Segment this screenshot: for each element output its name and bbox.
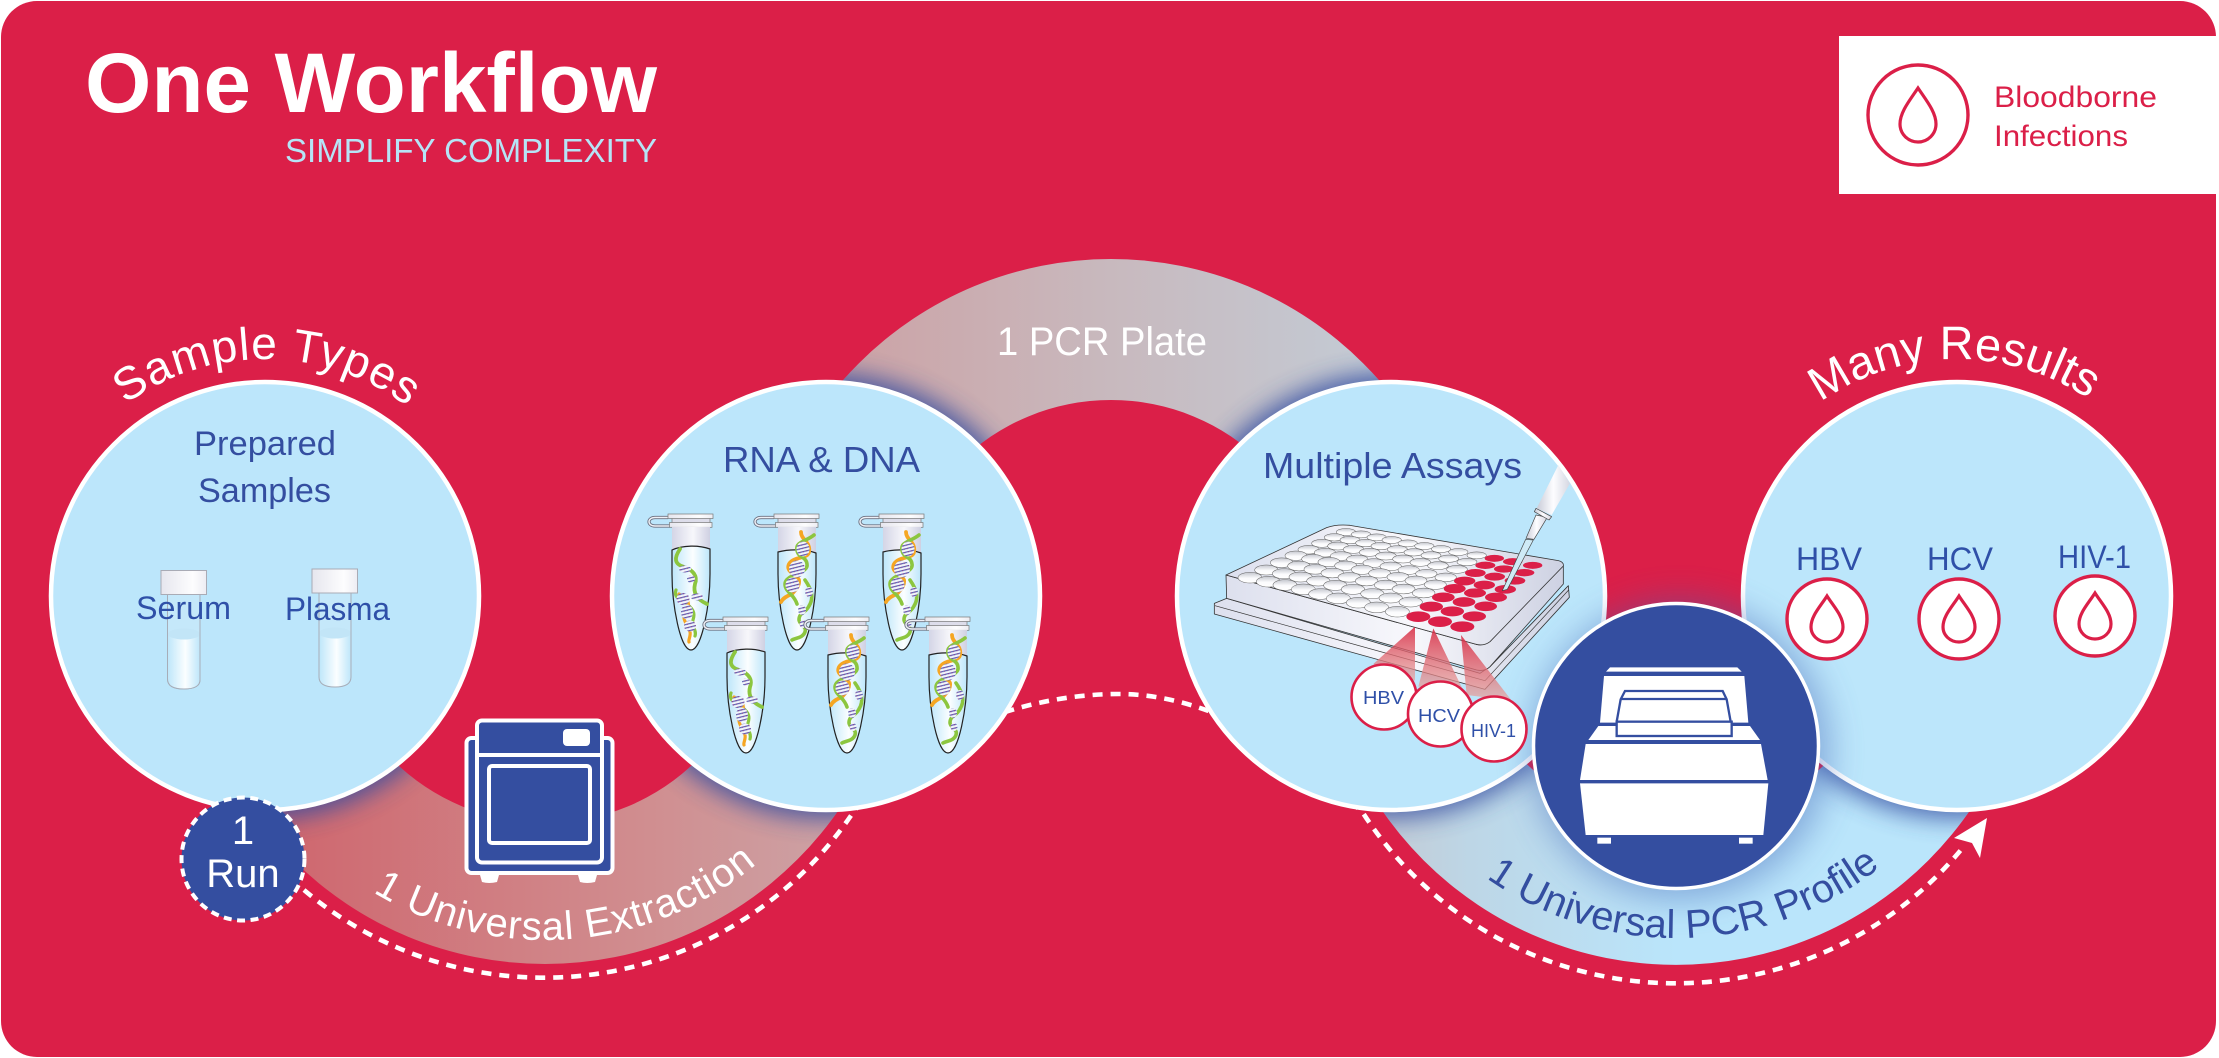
arc band: 1 universal PCR profile: [1383, 764, 1969, 965]
arrowhead: [1954, 818, 1987, 858]
heading: prepared samples: Prepared: [194, 425, 336, 463]
icon: tube with nucleic acid 6: [906, 617, 970, 753]
icon: tube with nucleic acid 4: [704, 617, 768, 753]
machine shadow glow: [1530, 600, 1830, 900]
assay badge: HCV: [1408, 682, 1473, 746]
icon: pipette: [1502, 465, 1570, 591]
RNA and DNA contents: [649, 439, 970, 753]
badge label: Bloodborne: [1994, 81, 2157, 114]
assay badge: HCV: HCV: [1418, 705, 1461, 726]
label: HBV: HBV: [1796, 541, 1863, 577]
category badge: bloodborne infections: [1839, 36, 2216, 194]
assay badge: HIV-1: HIV-1: [1471, 720, 1516, 741]
run marker text: 1: [232, 809, 254, 853]
panel: multiple assays circle: [1177, 382, 1605, 810]
panel: sample types circle: [51, 382, 479, 810]
heading: prepared samples: Samples: [198, 472, 331, 510]
assay badge: HIV-1: [1462, 696, 1526, 762]
panel: RNA and DNA circle: [612, 382, 1040, 810]
band label: 1 universal PCR profile: 1 Universal PCR Profile: [1488, 854, 1876, 938]
arc band: 1 PCR plate: [842, 259, 1379, 444]
PCR instrument circle: [1534, 604, 1818, 888]
badge label: Infections: [1994, 120, 2128, 153]
icon: blood drop in ring: [1868, 65, 1968, 165]
run marker text: Run: [206, 852, 280, 896]
icon: PCR well plate: [1214, 465, 1570, 701]
run marker: [182, 798, 304, 920]
many results contents: [1787, 539, 2135, 659]
sample tubes contents: [136, 425, 390, 689]
band label: 1 universal extraction: 1 Universal Extraction: [376, 851, 755, 940]
assay badge: HBV: HBV: [1363, 687, 1405, 708]
light beams from wells to assay badges: [1373, 627, 1512, 701]
icon: tube with nucleic acid 2: [755, 514, 819, 650]
heading: RNA and DNA: RNA & DNA: [723, 439, 920, 480]
icon: tube with nucleic acid 3: [860, 514, 924, 650]
dashed workflow path: [304, 694, 1965, 983]
label: HCV: HCV: [1927, 541, 1994, 577]
assay badge: HBV: [1352, 664, 1416, 730]
icon: serum tube: [161, 570, 206, 689]
panel: many results circle: [1743, 382, 2171, 810]
band label: 1 PCR plate: 1 PCR Plate: [997, 320, 1207, 364]
icon: thermal cycler: [1580, 667, 1768, 844]
heading: sample types: Sample Types: [114, 326, 417, 403]
title: One Workflow: [85, 36, 658, 130]
icon: tube with nucleic acid 1: [649, 514, 713, 650]
subtitle: SIMPLIFY COMPLEXITY: [285, 132, 657, 169]
heading: many results: Many Results: [1807, 326, 2098, 400]
icon: HIV-1 blood drop: [2055, 576, 2135, 656]
label: HIV-1: HIV-1: [2058, 539, 2131, 575]
label: plasma: Plasma: [285, 591, 390, 627]
icon: tube with nucleic acid 5: [805, 617, 869, 753]
icon: HBV blood drop: [1787, 579, 1867, 659]
label: serum: Serum: [136, 590, 231, 626]
multiple assays contents: [1214, 445, 1570, 762]
arc band: 1 universal extraction: [282, 766, 838, 964]
icon: extraction instrument: [466, 720, 612, 883]
icon: plasma tube: [312, 569, 358, 687]
icon: HCV blood drop: [1919, 579, 1999, 659]
heading: multiple assays: Multiple Assays: [1263, 445, 1522, 486]
